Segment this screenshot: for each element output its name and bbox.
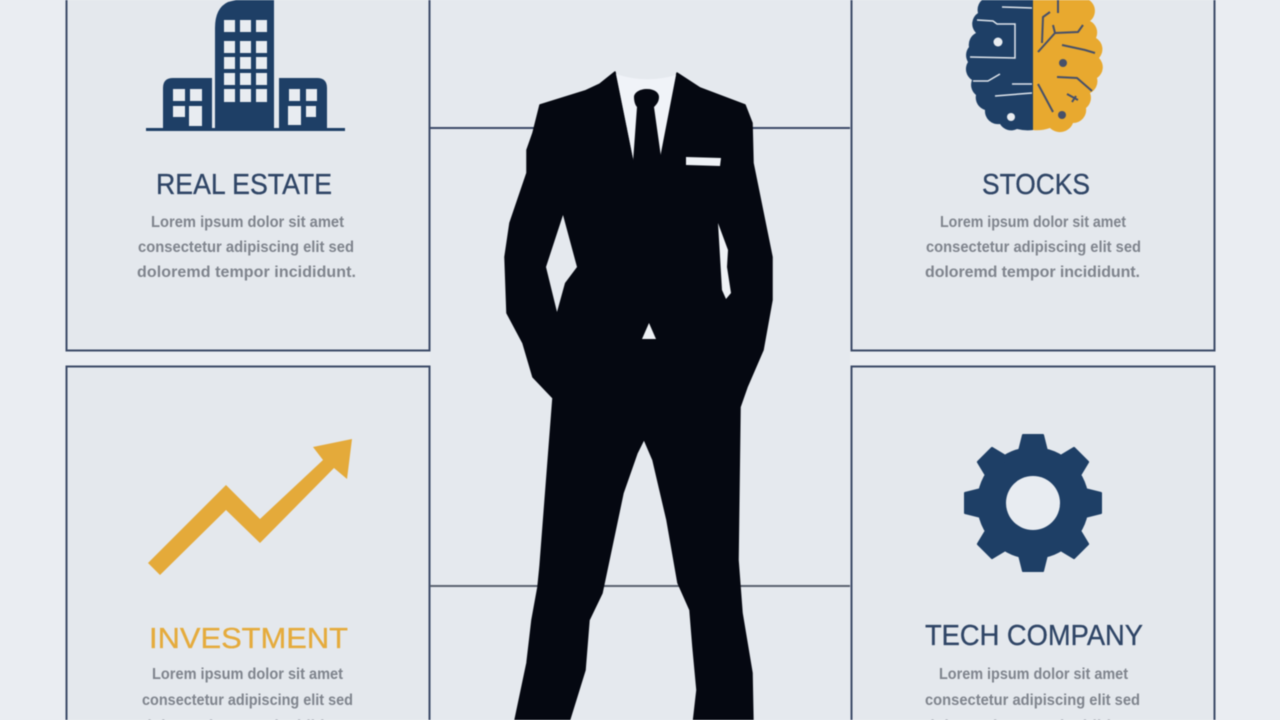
text block: stocks bbox=[925, 214, 1141, 281]
shirt collar bbox=[616, 74, 676, 158]
text block: stocks: Lorem ipsum dolor sit amet bbox=[940, 214, 1127, 231]
heading: stocks: STOCKS bbox=[982, 169, 1090, 201]
icon: city buildings bbox=[146, 0, 345, 131]
text block: stocks: consectetur adipiscing elit sed bbox=[926, 239, 1141, 256]
right arm gap bbox=[718, 223, 731, 299]
text block: real estate: consectetur adipiscing elit sed bbox=[138, 239, 354, 256]
panel: investment bbox=[66, 366, 430, 720]
text block: tech company: consectetur adipiscing elit sed bbox=[925, 692, 1140, 709]
left arm gap bbox=[546, 215, 577, 312]
heading: real estate: REAL ESTATE bbox=[156, 169, 332, 201]
pocket square bbox=[686, 157, 721, 166]
icon: rising arrow bbox=[148, 439, 352, 575]
text block: investment: Lorem ipsum dolor sit amet bbox=[152, 666, 344, 683]
text block: stocks: doloremd tempor incididunt. bbox=[925, 264, 1140, 281]
heading: tech company: TECH COMPANY bbox=[925, 620, 1143, 652]
text block: real estate: doloremd tempor incididunt. bbox=[137, 264, 356, 281]
necktie bbox=[632, 89, 661, 170]
panel: stocks bbox=[852, 0, 1214, 350]
icon: gear bbox=[965, 435, 1101, 571]
icon: circuit brain bbox=[966, 0, 1103, 132]
text block: investment: consectetur adipiscing elit sed bbox=[142, 692, 353, 709]
heading: investment: INVESTMENT bbox=[149, 623, 348, 655]
text block: real estate: Lorem ipsum dolor sit amet bbox=[151, 214, 345, 231]
figure: business person silhouette bbox=[505, 72, 772, 720]
text block: real estate bbox=[137, 214, 356, 281]
panel: real estate bbox=[66, 0, 430, 350]
text block: investment bbox=[142, 666, 353, 720]
panel: tech company bbox=[852, 366, 1214, 720]
text block: tech company: Lorem ipsum dolor sit amet bbox=[939, 666, 1129, 683]
jacket button gap bbox=[642, 323, 656, 339]
text block: tech company bbox=[925, 666, 1140, 720]
